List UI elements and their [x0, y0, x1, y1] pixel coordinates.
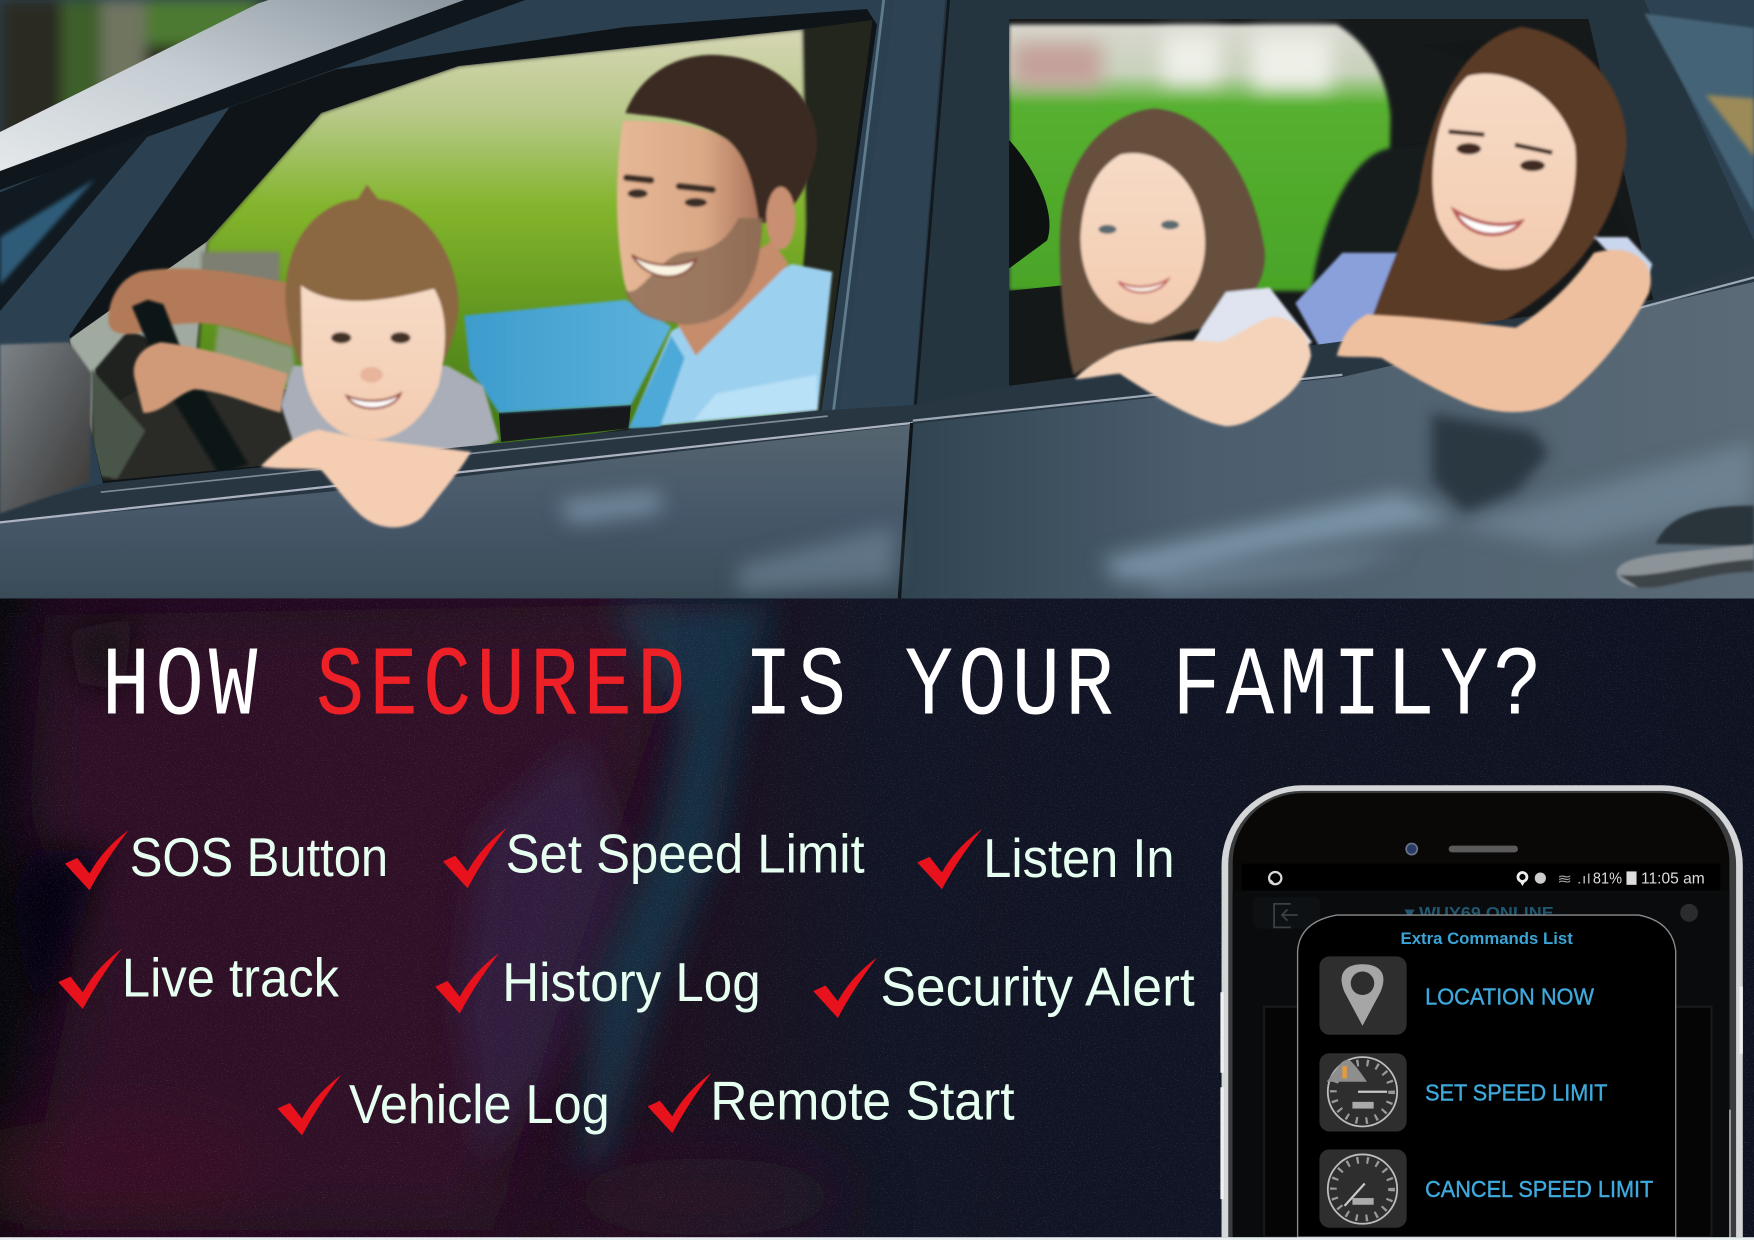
popup: extra commands — [1298, 915, 1676, 1237]
rear door panel — [899, 282, 1754, 598]
command: set speed limit: SET SPEED LIMIT — [1425, 1080, 1607, 1106]
feature: Remote Start: Remote Start — [710, 1070, 1015, 1132]
girl — [1060, 109, 1312, 375]
roof seal — [0, 0, 526, 190]
status bar — [1242, 864, 1720, 890]
man beard — [624, 218, 763, 324]
woman smile — [1454, 210, 1521, 235]
front window view — [67, 11, 884, 503]
woman face — [1433, 74, 1576, 269]
blurred street background — [0, 0, 302, 157]
woman eyes — [1448, 129, 1553, 171]
arms resting on doors — [261, 250, 1651, 527]
door handle — [1616, 506, 1754, 588]
front pillar — [0, 0, 526, 190]
boy arm — [261, 430, 471, 527]
feature: Set Speed Limit: Set Speed Limit — [506, 823, 865, 885]
camera — [1406, 843, 1417, 855]
door seam — [915, 0, 949, 409]
door reflections — [559, 442, 1754, 593]
car roof — [0, 0, 464, 171]
woman — [1295, 27, 1652, 358]
headrest — [1009, 140, 1049, 268]
boy — [281, 185, 499, 453]
girl face — [1081, 153, 1205, 323]
dimmed app behind popup: ▾ WUY69 ONLINE — [1404, 903, 1554, 922]
side mirror — [0, 342, 92, 513]
status bar: 81% — [1593, 871, 1622, 888]
phone mockup — [1220, 785, 1743, 1237]
man forearm and hand — [108, 269, 293, 347]
man neck — [671, 241, 789, 356]
speaker — [1449, 846, 1518, 852]
boy tee — [281, 366, 499, 453]
rear seat — [1309, 143, 1454, 313]
belt highlight — [0, 277, 1754, 522]
man shirt sleeve — [464, 300, 671, 413]
boy eyes — [331, 332, 411, 343]
feature: Security Alert: Security Alert — [880, 956, 1195, 1018]
girl shirt — [1192, 287, 1312, 369]
door belt strip — [0, 263, 1754, 528]
feature: SOS Button: SOS Button — [130, 826, 388, 888]
bottom edge strip — [0, 1237, 1754, 1240]
feature: Listen In: Listen In — [983, 827, 1175, 889]
door seam lower — [899, 423, 912, 598]
boy smile — [347, 394, 400, 408]
steering wheel — [132, 300, 248, 474]
girl arm — [1075, 317, 1311, 426]
woman hair — [1370, 27, 1627, 327]
man shirt — [629, 264, 832, 428]
title: HOW SECURED IS YOUR FAMILY? — [102, 633, 1547, 744]
man ear — [766, 187, 795, 249]
quarter glass — [0, 129, 154, 311]
feature: Live track: Live track — [122, 947, 339, 1009]
command: cancel speed limit — [1319, 1149, 1653, 1228]
man — [464, 55, 832, 428]
photo: family in car — [0, 0, 1754, 598]
command: location now — [1319, 956, 1594, 1035]
woman strap — [1594, 237, 1652, 291]
boy hand on wheel — [134, 342, 287, 413]
woman arm — [1337, 250, 1651, 412]
dimmed app behind popup — [1233, 890, 1729, 1237]
rear window view — [1007, 17, 1667, 397]
man hair — [625, 55, 817, 224]
rear pillar and window band — [913, 0, 1754, 408]
command: cancel speed limit: CANCEL SPEED LIMIT — [1425, 1176, 1653, 1202]
man face — [617, 121, 761, 323]
boy face — [301, 285, 445, 440]
status bar: ≋ .ıl — [1557, 872, 1591, 887]
woman shirt — [1295, 253, 1432, 358]
feature: History Log: History Log — [502, 951, 761, 1013]
dark nebula background — [0, 598, 1754, 1237]
girl eyes — [1098, 220, 1179, 234]
boy hair — [285, 185, 459, 375]
man smile — [632, 255, 696, 277]
boy nose — [360, 367, 383, 383]
feature: Vehicle Log: Vehicle Log — [349, 1073, 610, 1135]
woman arm shadow on door — [1432, 414, 1549, 512]
side buttons — [1220, 987, 1743, 1237]
man eyes — [623, 174, 716, 207]
girl smile — [1119, 280, 1168, 293]
status bar: 11:05 am — [1641, 871, 1705, 888]
rear small window — [1644, 13, 1754, 213]
inner door trim — [70, 212, 234, 438]
pillar seam — [833, 0, 884, 412]
front door panel — [0, 424, 917, 598]
phone body — [1222, 785, 1743, 1237]
command: location now: LOCATION NOW — [1425, 984, 1594, 1010]
popup title: Extra Commands List — [1401, 929, 1573, 948]
feature: Listen In — [917, 827, 1175, 889]
command: set speed limit — [1319, 1053, 1607, 1131]
window frame — [69, 9, 877, 483]
girl hair — [1060, 109, 1265, 375]
